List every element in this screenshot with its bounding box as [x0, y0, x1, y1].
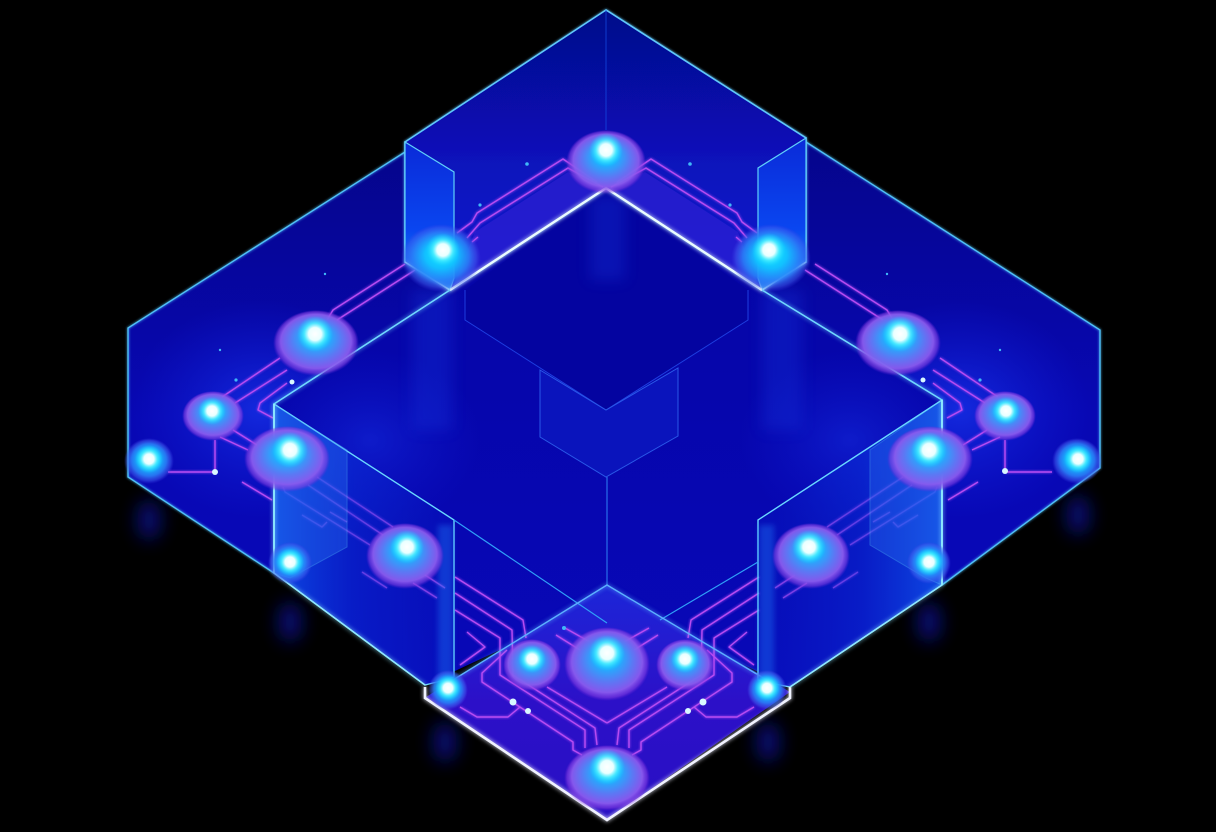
node — [731, 224, 811, 292]
floor glow: left — [260, 350, 480, 530]
panel: right wing — [758, 142, 1100, 687]
wall inner panel left — [274, 404, 347, 578]
top ridge line — [605, 10, 607, 130]
inner cube lines — [465, 290, 748, 410]
panel: back box right side — [758, 138, 806, 290]
panel: central floor — [274, 188, 942, 687]
wall column left — [438, 525, 453, 680]
wing glow: left — [130, 300, 390, 520]
node — [974, 391, 1036, 441]
node — [273, 310, 359, 376]
panel: central light columns — [412, 195, 802, 430]
node — [855, 310, 941, 376]
front right wall — [758, 400, 942, 687]
node — [401, 224, 481, 292]
panel: inner hexagon — [540, 368, 678, 477]
floor glow: right — [740, 350, 960, 530]
circuit traces — [168, 159, 1052, 755]
wall column right — [759, 525, 774, 680]
glowing nodes — [124, 130, 1102, 811]
panel: back box left side — [405, 142, 454, 290]
wing outline: left — [128, 152, 405, 573]
wing outline: right — [806, 142, 1100, 585]
center vertical edge — [606, 477, 608, 820]
small dots — [212, 162, 1008, 714]
node — [564, 627, 650, 701]
node — [907, 542, 951, 584]
wall inner panel right — [870, 400, 942, 585]
bright edges — [274, 188, 942, 820]
panel: left wing — [128, 152, 454, 685]
node — [887, 426, 973, 492]
node — [566, 130, 646, 194]
node — [1052, 438, 1102, 484]
node — [656, 639, 714, 691]
node — [428, 670, 468, 710]
purple strip: right — [608, 172, 762, 290]
node — [244, 426, 330, 492]
wing glow: right — [830, 300, 1090, 520]
panel: back top box — [405, 10, 806, 290]
node — [503, 639, 561, 691]
floor reflection — [137, 495, 1090, 762]
node — [268, 542, 312, 584]
node — [182, 391, 244, 441]
node — [747, 670, 787, 710]
purple strip: left — [450, 172, 604, 290]
node — [772, 523, 850, 589]
front left wall — [274, 404, 454, 685]
panel: bottom diamond — [426, 585, 790, 820]
node — [366, 523, 444, 589]
floor diagonals — [454, 520, 758, 623]
node — [564, 745, 650, 811]
panel: central top rhombus — [465, 188, 748, 410]
node — [124, 438, 174, 484]
